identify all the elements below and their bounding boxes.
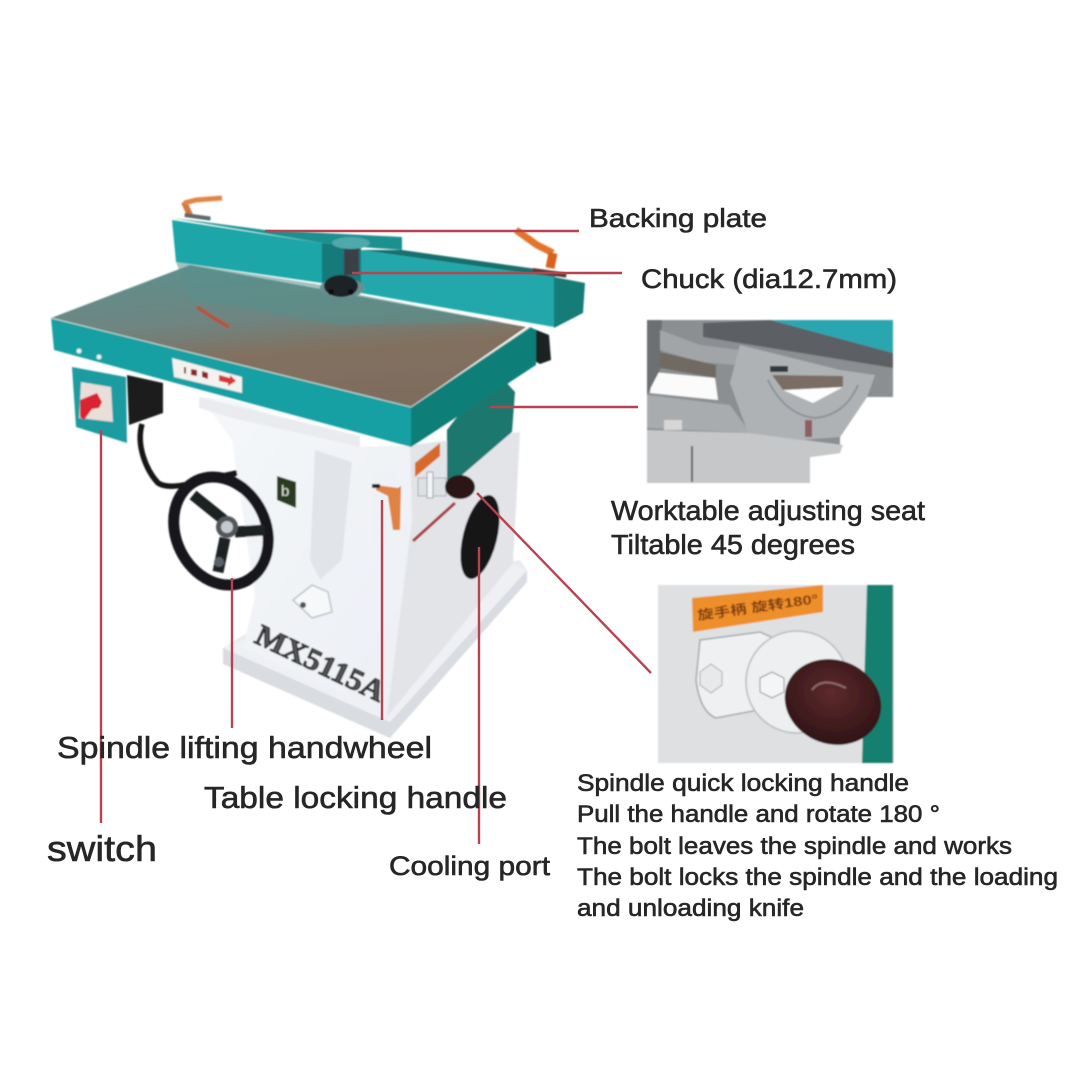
table right face [411, 327, 536, 447]
warning sticker [415, 443, 440, 477]
fence left plate [172, 220, 322, 283]
label: switch: switch [47, 828, 157, 869]
callout line: switch [100, 430, 102, 823]
table locking lever [372, 484, 401, 530]
label: worktable adjusting seat: Worktable adjusting seat [611, 495, 925, 526]
machine illustration [51, 198, 585, 738]
black control box [127, 375, 163, 425]
cabinet front body [199, 397, 412, 717]
gap behind fence [322, 243, 361, 293]
fence right plate [361, 250, 554, 327]
text block: quick locking handle instructions: The bolt leaves the spindle and works [577, 833, 1012, 860]
switch plate [72, 348, 127, 443]
label: chuck: Chuck (dia12.7mm) [641, 264, 897, 294]
handwheel [156, 461, 286, 601]
callout line: chuck [352, 272, 622, 274]
label: worktable adjusting seat: Tiltable 45 degrees [611, 529, 855, 560]
callout line: cooling port [478, 547, 480, 844]
text block: quick locking handle instructions: and unloading knife [577, 895, 804, 922]
callout line: table locking handle [381, 500, 383, 720]
text block: quick locking handle instructions [577, 770, 1058, 922]
cooling port [453, 491, 507, 583]
inset photo: quick locking handle: 旋手柄 旋转180° [696, 591, 819, 623]
label: backing plate: Backing plate [589, 203, 767, 233]
text block: quick locking handle instructions: Spindle quick locking handle [577, 770, 909, 797]
cabinet right side [384, 432, 520, 717]
table top surface [51, 265, 526, 407]
quick locking knob [445, 475, 475, 499]
logo badge: b [281, 483, 289, 500]
bracket under table [529, 327, 551, 364]
motor housing [447, 380, 515, 488]
base plate [223, 560, 527, 738]
clamp hardware [418, 472, 446, 498]
model name: MX5115A [250, 619, 391, 709]
text block: quick locking handle instructions: Pull the handle and rotate 180 ° [577, 801, 940, 828]
inset photo: worktable adjusting seat [647, 320, 893, 483]
right fence handle [516, 230, 567, 278]
table front face [51, 318, 411, 447]
callout line: backing plate [265, 230, 579, 232]
direction label [172, 358, 242, 393]
text block: quick locking handle instructions: The bolt locks the spindle and the loading [577, 864, 1058, 891]
spindle hub [320, 237, 370, 298]
label: cooling port: Cooling port [389, 851, 551, 881]
fence right end [554, 277, 585, 328]
callout line: worktable adjusting seat [490, 406, 638, 408]
label: table locking handle: Table locking handle [204, 780, 507, 815]
left fence handle [184, 198, 222, 221]
callout line: handwheel [231, 578, 233, 728]
table edge highlight [51, 318, 530, 407]
label: worktable adjusting seat [611, 495, 925, 560]
spindle foot casting [293, 585, 332, 618]
callout line: quick locking handle [477, 493, 651, 673]
fence top face [172, 218, 402, 250]
logo badge [277, 476, 296, 508]
label: spindle lifting handwheel: Spindle lifting handwheel [57, 730, 432, 765]
inset photo: quick locking handle [658, 585, 894, 763]
power cable [140, 424, 237, 486]
red mark on table [197, 307, 229, 327]
fence reflection on table [176, 262, 500, 325]
red pointer on cabinet [413, 503, 455, 541]
